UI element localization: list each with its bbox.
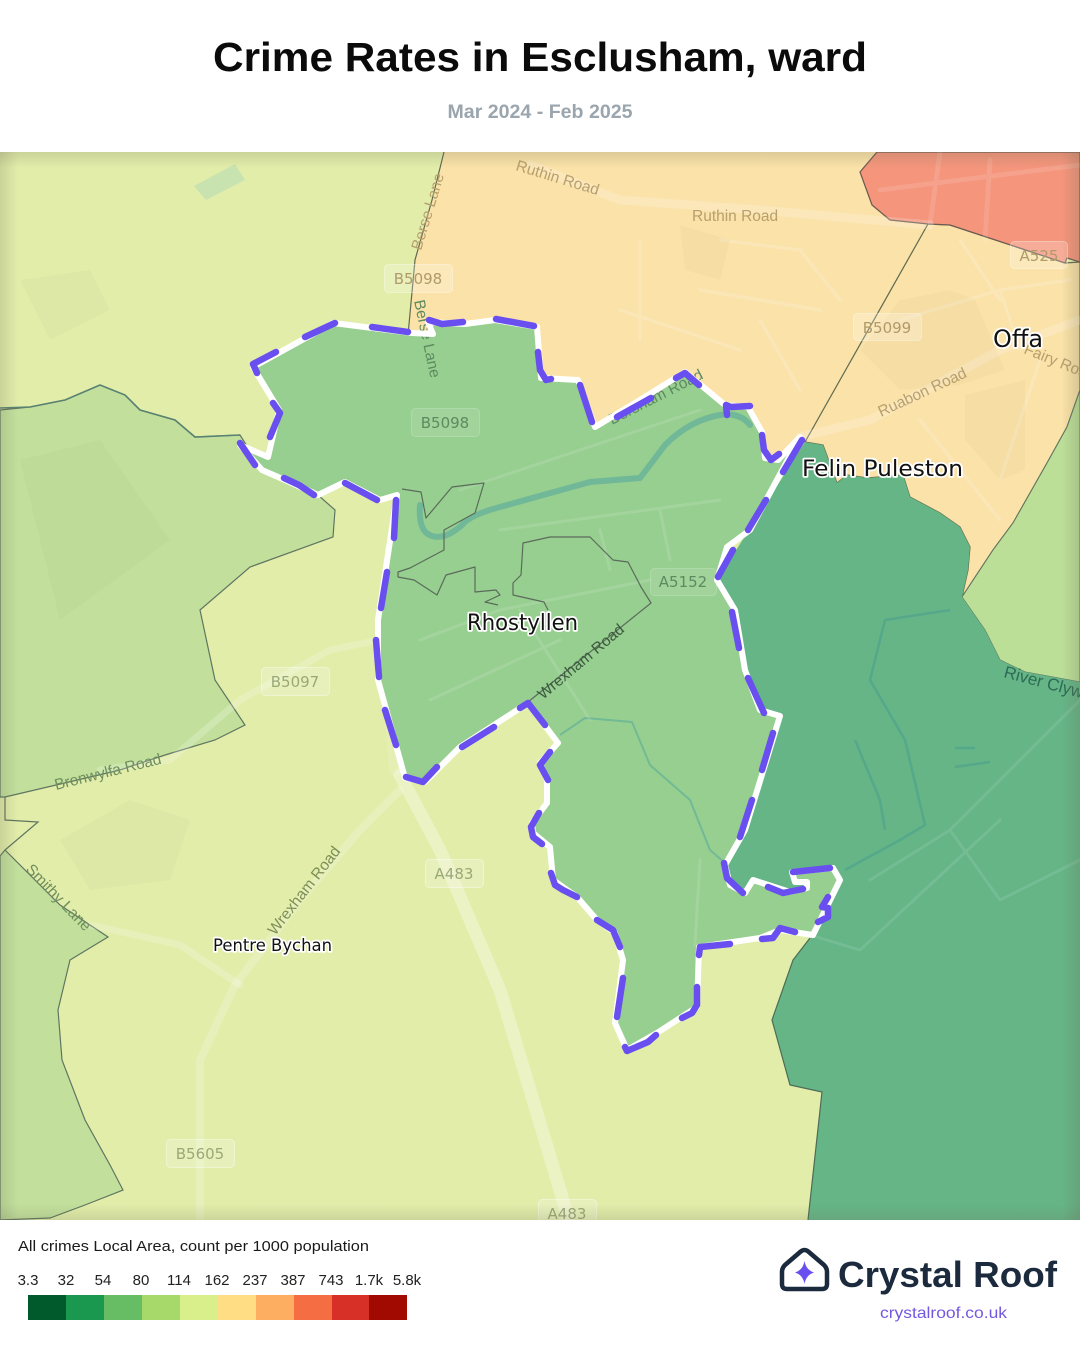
label: Berse Lane south: Berse Lane — [410, 298, 443, 379]
legend value labels: 32 — [58, 1272, 74, 1289]
place label: Offa: Offa — [993, 325, 1043, 353]
place label: Pentre Bychan: Pentre Bychan — [213, 936, 332, 956]
legend value labels: 237 — [242, 1272, 268, 1289]
icon: house with star — [782, 1250, 827, 1289]
legend value labels: 387 — [280, 1272, 306, 1289]
ward area: Esclusham — [240, 320, 840, 1050]
legend — [18, 1238, 422, 1320]
legend value labels: 80 — [133, 1272, 149, 1289]
map base: pale yellow-green area — [0, 152, 1080, 1220]
road shield: A525 — [1010, 242, 1068, 268]
road shield: A483 south — [538, 1200, 596, 1228]
road shield: B5098 south — [412, 408, 480, 436]
region boundary: north line — [408, 152, 444, 335]
roads and street network — [90, 152, 1080, 1225]
legend value labels: 114 — [167, 1272, 191, 1289]
road labels — [22, 158, 1080, 938]
map — [0, 152, 1080, 1228]
label: Wrexham Road west: Wrexham Road — [265, 843, 344, 938]
road shield: B5097: B5097 — [271, 673, 319, 691]
road shield: B5097 — [262, 668, 330, 696]
road shield: A483 north: A483 — [435, 865, 473, 883]
label: Ruthin Road upper: Ruthin Road — [514, 158, 601, 199]
website: crystalroof.co.uk — [880, 1305, 1008, 1322]
place label: Rhostyllen: Rhostyllen — [467, 610, 578, 636]
label: Berse Lane north: Berse Lane — [409, 171, 448, 252]
region boundary: dark green south edge — [772, 938, 822, 1220]
label: Ruabon Road: Ruabon Road — [876, 365, 969, 421]
label: Ruthin Road: Ruthin Road — [692, 208, 778, 225]
stream south of ward — [560, 718, 725, 863]
road shield: A483 south: A483 — [548, 1205, 586, 1223]
wordmark: Crystal Roof — [838, 1254, 1058, 1295]
legend value labels: 1.7k — [355, 1272, 384, 1289]
place label: Felin Puleston: Felin Puleston — [802, 456, 963, 482]
legend value labels — [18, 1272, 422, 1289]
road shield: B5098 north — [384, 264, 452, 292]
road shield: B5099: B5099 — [863, 319, 911, 337]
road shield: B5098 south: B5098 — [421, 414, 469, 432]
title: Crime Rates in Esclusham, ward — [213, 34, 867, 80]
region: orange central north area — [408, 152, 928, 470]
road shield: A525: A525 — [1020, 247, 1058, 265]
region: Offa orange area — [805, 224, 1080, 597]
label: Wrexham Road east: Wrexham Road — [535, 621, 628, 703]
region: right light green area — [962, 390, 1080, 682]
region: bottom-left green area — [0, 850, 123, 1220]
road shield: B5099 — [854, 314, 922, 340]
legend value labels: 743 — [318, 1272, 344, 1289]
road shield: B5605: B5605 — [176, 1145, 224, 1163]
subtitle: date range: Mar 2024 - Feb 2025 — [448, 102, 633, 123]
legend value labels: 3.3 — [18, 1272, 38, 1289]
ward outline: white casing with purple dashes — [240, 319, 840, 1051]
road shield: A5152: A5152 — [659, 573, 707, 591]
woods and land patches — [20, 225, 1025, 890]
map edge vignette — [0, 152, 1080, 1220]
road shield: B5098 north: B5098 — [394, 270, 442, 288]
region: salmon high-crime area — [860, 152, 1080, 263]
streets within ward — [420, 410, 720, 945]
river through ward — [420, 414, 750, 537]
legend value labels: 5.8k — [393, 1272, 422, 1289]
legend title: All crimes Local Area, count per 1000 population — [18, 1238, 369, 1255]
label: Smithy Lane: Smithy Lane — [22, 861, 94, 935]
region: pale strip boundary — [5, 797, 38, 850]
region: dark green area — [700, 442, 1080, 1220]
road shield: B5605 — [166, 1140, 234, 1168]
stream right area — [845, 610, 990, 870]
river upper-left — [0, 385, 240, 437]
logo: Crystal Roof — [782, 1250, 1058, 1322]
road shield: A5152 — [650, 568, 716, 596]
legend value labels: 162 — [204, 1272, 230, 1289]
legend value labels: 54 — [95, 1272, 111, 1289]
internal boundaries of Rhostyllen — [398, 483, 651, 702]
road shield: A483 north — [426, 860, 484, 888]
park patch — [194, 164, 245, 200]
legend colour scale — [28, 1295, 407, 1320]
label: Bronwylfa Road: Bronwylfa Road — [53, 751, 163, 794]
region: left green area — [0, 385, 335, 797]
label: Bersham Road: Bersham Road — [606, 366, 706, 429]
